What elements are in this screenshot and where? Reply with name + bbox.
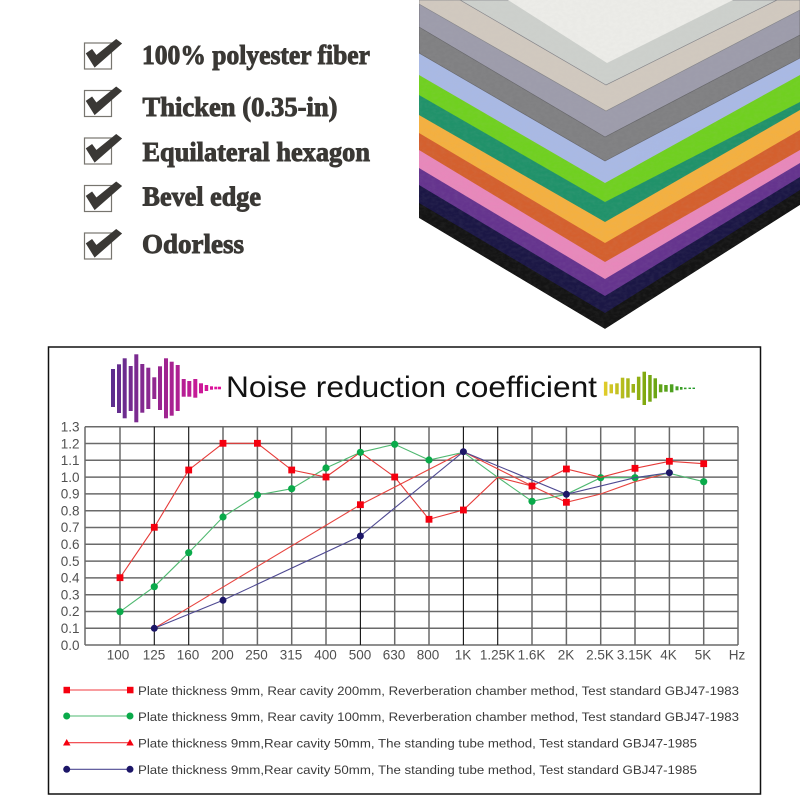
y axis labels: 0.4	[61, 571, 80, 586]
y axis labels	[61, 420, 80, 653]
legend row: 100mm reverberation: Plate thickness 9mm, Rear cavity 100mm, Reverberation chamber method, Test standard GBJ47-1983	[138, 710, 739, 724]
chart frame	[48, 347, 760, 794]
x axis labels: 800	[417, 648, 439, 662]
feature: bevel edge	[84, 182, 261, 212]
feature: 100% polyester fiber: 100% polyester fiber	[142, 40, 370, 70]
x axis labels: 400	[314, 648, 337, 662]
y axis labels: 1.0	[61, 470, 80, 485]
y axis labels: 1.2	[61, 436, 80, 451]
series: rear cavity 50mm tube, red	[154, 452, 669, 628]
x axis labels: 100	[107, 648, 129, 662]
x axis labels: 2K	[558, 648, 574, 662]
series: rear cavity 200mm, red	[117, 440, 707, 581]
x axis labels	[107, 648, 745, 662]
y axis labels: 0.3	[61, 587, 80, 602]
x axis labels: 2.5K	[586, 648, 614, 662]
x axis labels: 5K	[695, 648, 711, 662]
photo: stack of coloured felt panels	[419, 0, 800, 340]
x axis labels: 1.25K	[480, 648, 515, 662]
feature: thicken	[84, 87, 338, 122]
x axis labels: 1.6K	[518, 648, 545, 662]
feature: bevel edge: Bevel edge	[142, 182, 261, 212]
feature checklist	[84, 40, 370, 259]
legend row: 50mm standing tube, purple: Plate thickness 9mm,Rear cavity 50mm, The standing tube method, Test standard GBJ47-1985	[138, 763, 697, 777]
x axis labels: 630	[383, 648, 405, 662]
legend	[63, 684, 739, 777]
icon: green sound wave	[604, 372, 695, 405]
legend row: 50mm standing tube, red: Plate thickness 9mm,Rear cavity 50mm, The standing tube method, Test standard GBJ47-1985	[138, 736, 697, 750]
y axis labels: 0.6	[61, 537, 80, 552]
green dot over red at 500 Hz	[357, 449, 364, 456]
y axis labels: 0.8	[61, 503, 80, 518]
feature: equilateral hexagon: Equilateral hexagon	[142, 137, 370, 167]
y axis labels: 0.2	[61, 604, 80, 619]
y axis labels: 0.9	[61, 487, 80, 502]
line chart	[61, 420, 745, 662]
icon: purple sound wave	[111, 354, 221, 422]
feature: odorless	[84, 229, 244, 259]
y axis labels: 1.1	[61, 453, 80, 468]
feature: thicken: Thicken (0.35-in)	[142, 92, 338, 122]
x axis labels: 250	[245, 648, 268, 662]
x axis labels: Hz	[729, 648, 745, 662]
legend row: 200mm reverberation: Plate thickness 9mm, Rear cavity 200mm, Reverberation chamber method, Test standard GBJ47-1983	[138, 684, 739, 698]
x axis labels: 125	[143, 648, 165, 662]
x axis labels: 1K	[455, 648, 471, 662]
title: noise reduction coefficient: Noise reduction coefficient	[226, 371, 597, 404]
y axis labels: 0.0	[61, 638, 80, 653]
y axis labels: 1.3	[61, 420, 80, 434]
x axis labels: 315	[280, 648, 302, 662]
series: rear cavity 50mm tube, purple	[151, 448, 673, 632]
y axis labels: 0.1	[61, 621, 80, 636]
x axis labels: 500	[349, 648, 371, 662]
feature: odorless: Odorless	[142, 229, 244, 259]
x axis labels: 3.15K	[617, 648, 652, 662]
y axis labels: 0.5	[61, 554, 80, 569]
y axis labels: 0.7	[61, 520, 80, 535]
x axis labels: 4K	[660, 648, 677, 662]
series: rear cavity 100mm, green	[116, 441, 707, 615]
x axis labels: 160	[177, 648, 199, 662]
x axis labels: 200	[211, 648, 234, 662]
